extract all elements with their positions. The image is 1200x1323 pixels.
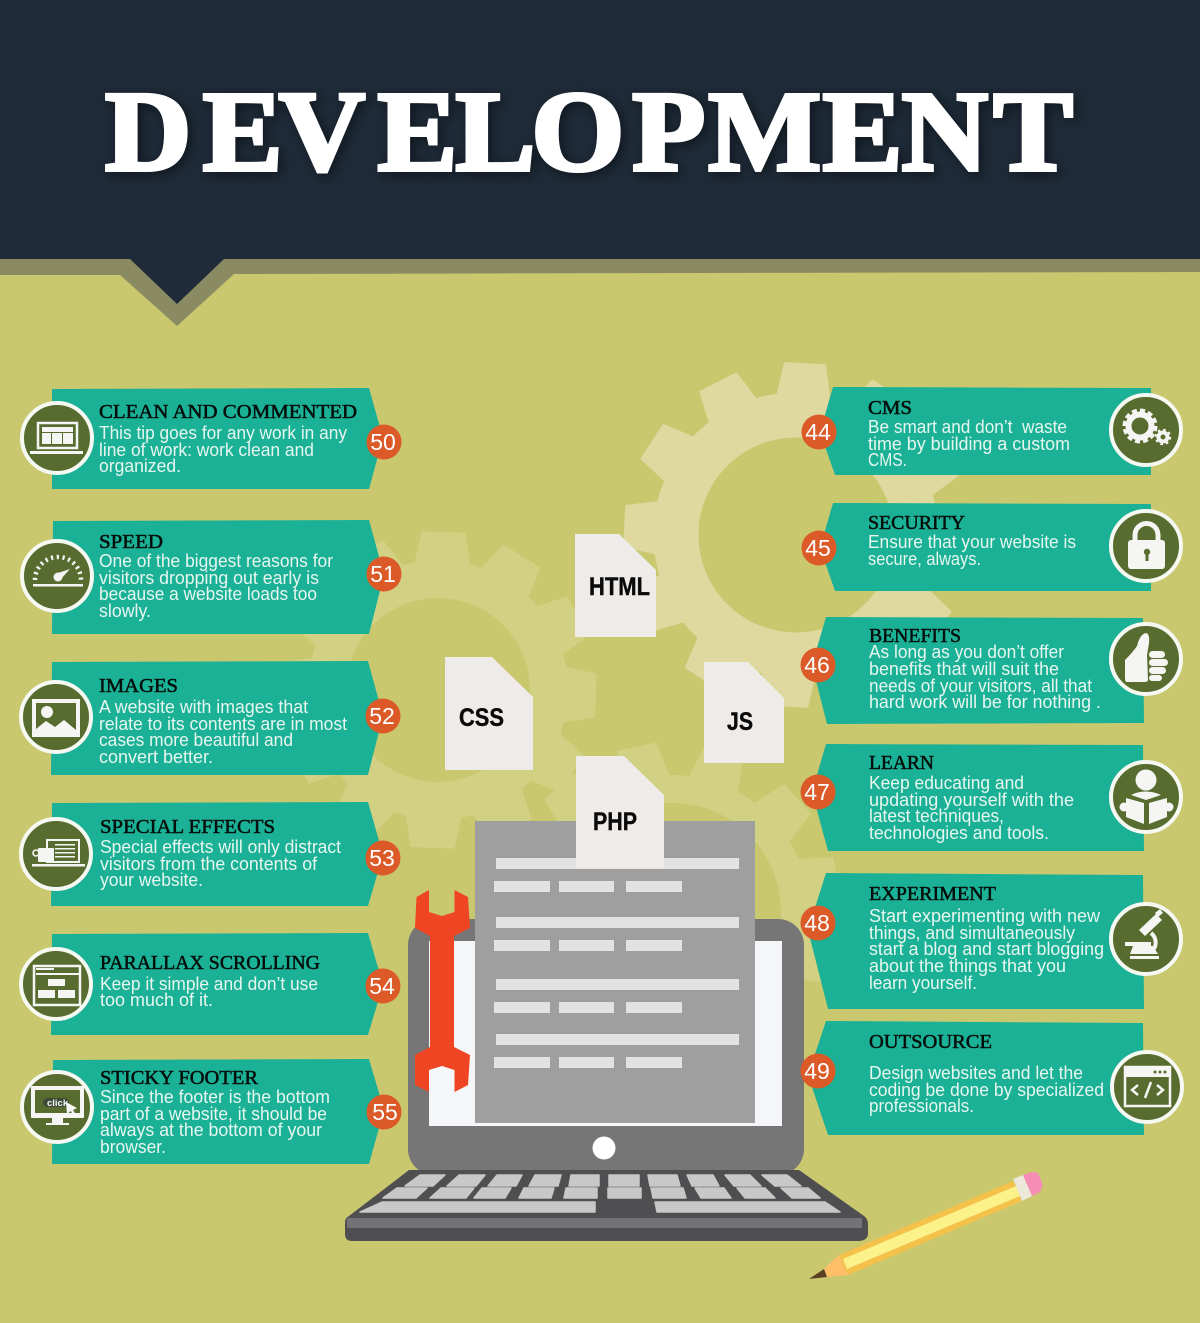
icon: speedometer xyxy=(22,541,92,611)
body text xyxy=(99,550,333,621)
body text xyxy=(99,696,347,767)
heading: STICKY FOOTER xyxy=(100,1067,258,1089)
body text xyxy=(869,1062,1104,1116)
body text: Since the footer is the bottom xyxy=(100,1086,330,1107)
gear: large top right background gear xyxy=(623,362,969,708)
number badge: 52 xyxy=(369,703,395,729)
heading: CMS xyxy=(868,397,912,419)
body text: things, and simultaneously xyxy=(869,922,1076,943)
body text: start a blog and start blogging xyxy=(869,938,1104,959)
body text: browser. xyxy=(100,1136,166,1157)
number badge: 45 xyxy=(805,535,831,561)
body text: visitors from the contents of xyxy=(100,853,318,874)
heading: SPECIAL EFFECTS xyxy=(100,816,275,838)
icon: picture xyxy=(21,682,91,752)
body text: Be smart and don’t waste xyxy=(868,416,1067,437)
icon: laptop xyxy=(22,403,92,473)
icon: padlock xyxy=(1111,511,1181,581)
icon: microscope xyxy=(1111,904,1181,974)
paper document xyxy=(475,821,755,1123)
number badge xyxy=(366,698,400,734)
body text: too much of it. xyxy=(100,989,213,1010)
body text xyxy=(100,836,341,890)
file icon: HTML: HTML xyxy=(589,573,650,601)
gear: lower right background gear xyxy=(503,741,843,1035)
body text: line of work: work clean and xyxy=(99,439,314,460)
body text: Keep educating and xyxy=(869,772,1024,793)
number badge: 47 xyxy=(804,779,830,805)
icon: click monitor: click xyxy=(47,1098,69,1109)
heading: SECURITY xyxy=(868,512,965,534)
laptop camera dot xyxy=(592,1136,616,1160)
heading: OUTSOURCE xyxy=(869,1031,992,1053)
file icon: CSS xyxy=(445,657,533,770)
heading: PARALLAX SCROLLING xyxy=(100,952,320,974)
number badge xyxy=(800,1054,836,1088)
file icon: JS: JS xyxy=(727,708,753,736)
panel: experiment xyxy=(800,873,1181,1009)
body text: One of the biggest reasons for xyxy=(99,550,333,571)
body text: updating yourself with the xyxy=(869,789,1074,810)
icon: click monitor xyxy=(22,1072,92,1142)
panel: speed xyxy=(22,520,402,634)
number badge: 50 xyxy=(370,429,396,455)
number badge xyxy=(366,1094,402,1130)
body text: slowly. xyxy=(99,600,151,621)
body text: convert better. xyxy=(99,746,213,767)
body text: always at the bottom of your xyxy=(100,1119,322,1140)
body text: Keep it simple and don’t use xyxy=(100,973,318,994)
icon: pencil xyxy=(809,1172,1043,1279)
body text xyxy=(869,772,1074,843)
body text xyxy=(99,422,348,476)
icon: coffee and laptop xyxy=(21,819,91,889)
panel: images xyxy=(21,661,400,775)
number badge: 53 xyxy=(369,845,395,871)
body text: secure, always. xyxy=(868,548,981,569)
number badge xyxy=(800,906,836,940)
laptop illustration xyxy=(345,919,868,1241)
body text xyxy=(868,531,1076,569)
number badge xyxy=(802,414,836,450)
file icon: HTML xyxy=(575,534,656,637)
file icon: PHP: PHP xyxy=(593,808,637,836)
panel: benefits xyxy=(800,617,1181,724)
body text: learn yourself. xyxy=(869,972,977,993)
body text: coding be done by specialized xyxy=(869,1079,1104,1100)
number badge: 46 xyxy=(804,652,830,678)
keyboard keys xyxy=(360,1175,840,1212)
panel: learn xyxy=(800,744,1181,851)
number badge: 48 xyxy=(804,910,830,936)
number badge xyxy=(366,840,400,876)
body text xyxy=(869,905,1104,993)
number badge xyxy=(366,556,402,592)
body text xyxy=(100,1086,330,1157)
laptop screen xyxy=(429,941,782,1126)
number badge: 55 xyxy=(372,1099,398,1125)
body text: needs of your visitors, all that xyxy=(869,675,1092,696)
heading: EXPERIMENT xyxy=(869,883,996,905)
number badge: 49 xyxy=(804,1058,830,1084)
number badge xyxy=(802,530,836,566)
panel: security xyxy=(802,503,1181,591)
body text: Design websites and let the xyxy=(869,1062,1083,1083)
body text: cases more beautiful and xyxy=(99,729,293,750)
panel: sticky footer xyxy=(22,1059,402,1164)
number badge: 44 xyxy=(805,419,831,445)
body text: A website with images that xyxy=(99,696,308,717)
heading: BENEFITS xyxy=(869,625,961,647)
body text xyxy=(868,416,1070,470)
number badge xyxy=(366,424,402,460)
body text: hard work will be for nothing . xyxy=(869,691,1101,712)
icon: gears xyxy=(1111,395,1181,465)
body text xyxy=(100,973,318,1010)
body text: professionals. xyxy=(869,1095,974,1116)
icon: reader with book xyxy=(1111,762,1181,832)
laptop lid xyxy=(408,919,804,1175)
body text: organized. xyxy=(99,455,181,476)
number badge: 54 xyxy=(369,973,395,999)
gear: centre left background gear xyxy=(279,531,597,849)
body text: As long as you don’t offer xyxy=(869,641,1064,662)
keyboard xyxy=(345,1170,868,1241)
panel: parallax scrolling xyxy=(21,933,400,1035)
body text xyxy=(869,641,1101,712)
icon: browser window xyxy=(21,949,91,1019)
icon: wrench xyxy=(415,890,470,1092)
body text: relate to its contents are in most xyxy=(99,713,347,734)
body text: technologies and tools. xyxy=(869,822,1049,843)
body text: visitors dropping out early is xyxy=(99,567,319,588)
file icon: JS xyxy=(704,662,784,763)
body text: part of a website, it should be xyxy=(100,1103,327,1124)
icon: code window xyxy=(1112,1052,1182,1122)
keyboard edge strip xyxy=(347,1218,862,1228)
body text: your website. xyxy=(100,869,203,890)
number badge xyxy=(366,968,400,1004)
body text: about the things that you xyxy=(869,955,1066,976)
heading: IMAGES xyxy=(99,675,178,697)
body text: because a website loads too xyxy=(99,583,317,604)
body text: benefits that will suit the xyxy=(869,658,1059,679)
body text: Start experimenting with new xyxy=(869,905,1101,926)
body text: time by building a custom xyxy=(868,433,1070,454)
body text: Special effects will only distract xyxy=(100,836,341,857)
panel: clean and commented xyxy=(22,388,402,489)
panel: outsource xyxy=(800,1021,1182,1135)
body text: This tip goes for any work in any xyxy=(99,422,348,443)
body text: Ensure that your website is xyxy=(868,531,1076,552)
title: DEVELOPMENT xyxy=(105,68,1073,195)
number badge: 51 xyxy=(370,561,396,587)
file icon: PHP xyxy=(576,756,664,868)
heading: SPEED xyxy=(99,531,163,553)
panel: cms xyxy=(802,387,1181,475)
panel: special effects xyxy=(21,802,400,906)
heading: LEARN xyxy=(869,752,934,774)
body text: CMS. xyxy=(868,449,907,470)
number badge xyxy=(800,774,836,810)
icon: thumbs up xyxy=(1111,624,1181,694)
number badge xyxy=(800,648,836,682)
header banner xyxy=(0,0,1200,326)
heading: CLEAN AND COMMENTED xyxy=(99,401,357,423)
body text: latest techniques, xyxy=(869,805,1004,826)
file icon: CSS: CSS xyxy=(459,704,504,732)
